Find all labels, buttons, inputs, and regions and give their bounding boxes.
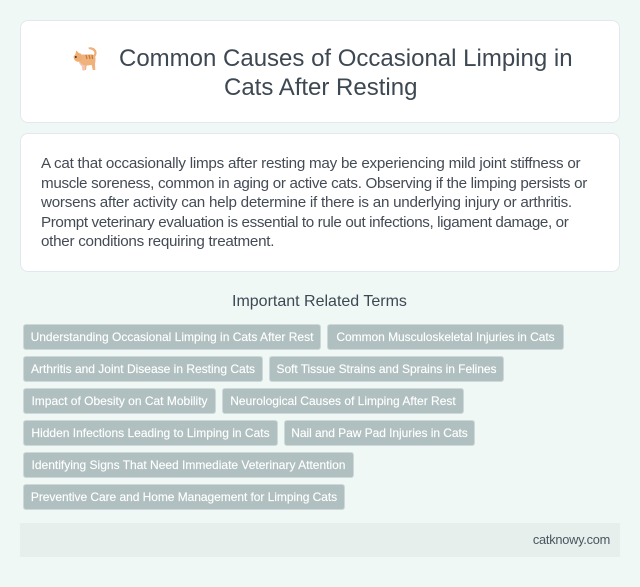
title heading: Common Causes of Occasional Limping in	[119, 45, 573, 72]
description text: A cat that occasionally limps after resting may be experiencing mild joint stiffness or	[41, 155, 580, 172]
tag: Identifying Signs That Need Immediate Veterinary Attention	[32, 458, 345, 472]
panel: title card	[20, 20, 620, 123]
tag	[222, 388, 464, 414]
panel: title card: Cats After Resting	[224, 74, 417, 101]
description text: muscle soreness, common in aging or active cats. Observing if the limping persists or	[41, 175, 587, 192]
description text: other conditions requiring treatment.	[41, 233, 274, 250]
footer source text: catknowy.com	[533, 532, 610, 547]
tag	[23, 452, 354, 478]
tag: Arthritis and Joint Disease in Resting Cats	[31, 362, 255, 376]
icon: cat	[74, 47, 97, 70]
tag	[23, 484, 345, 510]
tag: Common Musculoskeletal Injuries in Cats	[336, 330, 555, 344]
tag: Understanding Occasional Limping in Cats After Rest	[31, 330, 313, 344]
tag list	[23, 324, 564, 510]
description text	[41, 155, 588, 250]
tag	[284, 420, 475, 446]
tag	[269, 356, 504, 382]
tag	[23, 420, 278, 446]
tag	[23, 324, 321, 350]
tag: Nail and Paw Pad Injuries in Cats	[291, 426, 468, 440]
tag	[327, 324, 564, 350]
description text: worsens after activity can help determine if there is an underlying injury or arthritis.	[41, 194, 572, 211]
tag: Soft Tissue Strains and Sprains in Felines	[276, 362, 496, 376]
description text: Prompt veterinary evaluation is essential to rule out infections, ligament damage, or	[41, 214, 568, 231]
tag	[23, 356, 263, 382]
panel: description	[20, 133, 620, 272]
tag: Neurological Causes of Limping After Rest	[230, 394, 456, 408]
heading: important related terms: Important Related Terms	[232, 293, 407, 310]
tag: Hidden Infections Leading to Limping in Cats	[31, 426, 270, 440]
tag: Impact of Obesity on Cat Mobility	[31, 394, 208, 408]
tag	[23, 388, 216, 414]
footer bar	[20, 523, 620, 557]
tag: Preventive Care and Home Management for Limping Cats	[31, 490, 337, 504]
